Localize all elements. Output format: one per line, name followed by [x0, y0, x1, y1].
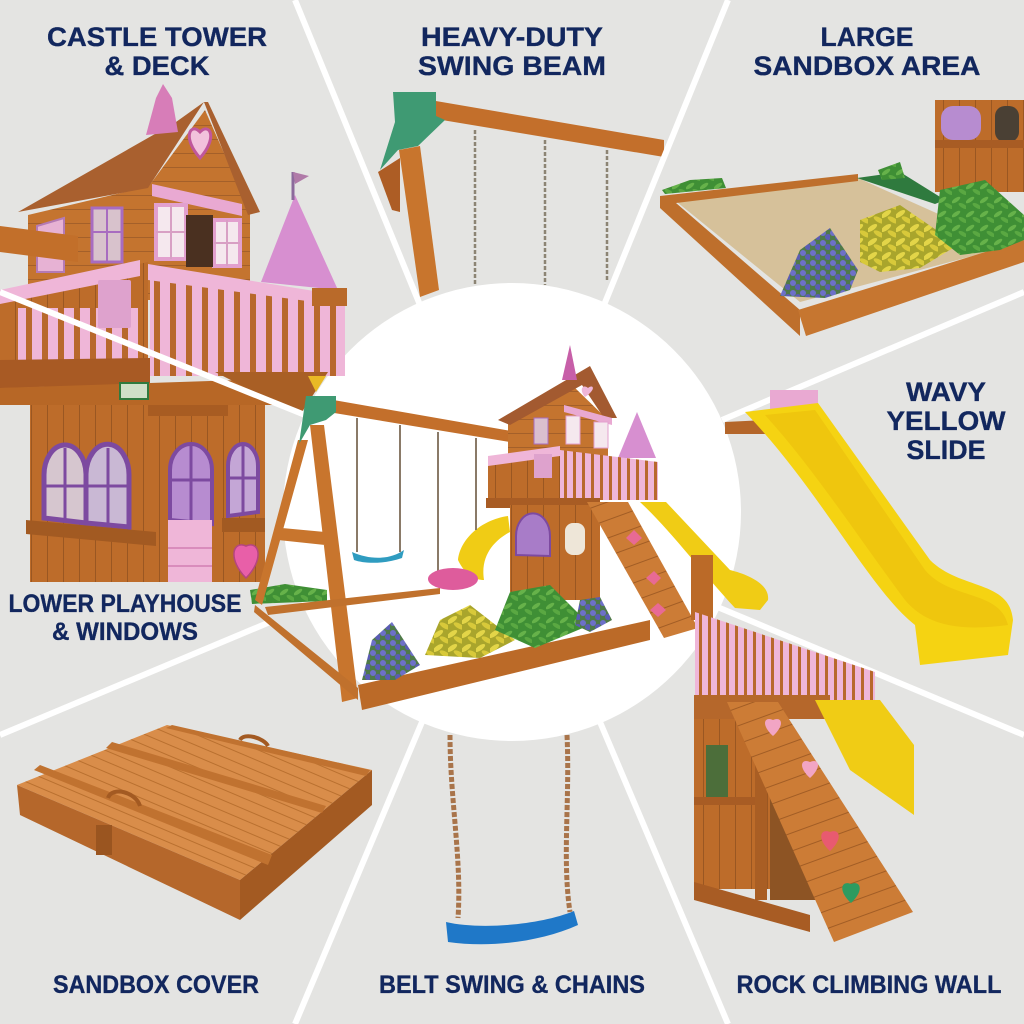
- sub: center climbing wall: [587, 502, 698, 638]
- castle divider line: [0, 292, 305, 415]
- heading: castle tower & deck: & DECK: [104, 51, 210, 81]
- illustration: center playset: [254, 345, 768, 710]
- heading: lower playhouse & windows: LOWER PLAYHOUSE: [8, 590, 242, 618]
- sub: center belt swing: [352, 550, 404, 563]
- heading: large sandbox area: LARGE: [820, 22, 914, 52]
- sub: center plants: [362, 622, 420, 680]
- heading: belt swing & chains: BELT SWING & CHAINS: [379, 971, 645, 999]
- illustration: wavy yellow slide: [725, 390, 1013, 665]
- center white circle: [283, 283, 741, 741]
- heading: heavy-duty swing beam: HEAVY-DUTY: [421, 22, 603, 52]
- heading: wavy yellow slide: YELLOW: [886, 406, 1006, 436]
- illustration: swing beam: [378, 92, 664, 297]
- illustration: large sandbox area: [660, 100, 1024, 336]
- heading: large sandbox area: [754, 22, 980, 81]
- heading: sandbox cover: SANDBOX COVER: [53, 971, 259, 999]
- heading: lower playhouse & windows: & WINDOWS: [52, 618, 198, 646]
- heading: wavy yellow slide: SLIDE: [906, 435, 986, 465]
- sub: center slides: [640, 502, 768, 610]
- sub: center chains: [357, 418, 476, 572]
- illustration: belt swing and chains: [446, 735, 578, 944]
- illustration: lower playhouse and windows: [26, 398, 327, 604]
- sub: center sandbox: [254, 588, 440, 700]
- illustration: castle tower and deck: [0, 84, 347, 415]
- sub: center swing beam: [322, 398, 528, 445]
- heading: wavy yellow slide: WAVY: [906, 377, 986, 407]
- illustration: sandbox cover: [17, 725, 372, 920]
- heading: lower playhouse & windows: [8, 590, 242, 646]
- heading: rock climbing wall: ROCK CLIMBING WALL: [736, 971, 1002, 999]
- heading: castle tower & deck: [47, 22, 267, 81]
- heading: castle tower & deck: CASTLE TOWER: [47, 22, 267, 52]
- heading: large sandbox area: SANDBOX AREA: [754, 51, 980, 81]
- sub: center a-frame: [255, 425, 358, 702]
- sub: center pink swing: [428, 568, 478, 590]
- heading: heavy-duty swing beam: SWING BEAM: [418, 51, 606, 81]
- sub: center bracket: [299, 396, 336, 444]
- sub: center tower: [508, 385, 608, 460]
- heading: wavy yellow slide: [886, 377, 1006, 465]
- illustration: rock climbing wall: [694, 612, 914, 942]
- heading: heavy-duty swing beam: [418, 22, 606, 81]
